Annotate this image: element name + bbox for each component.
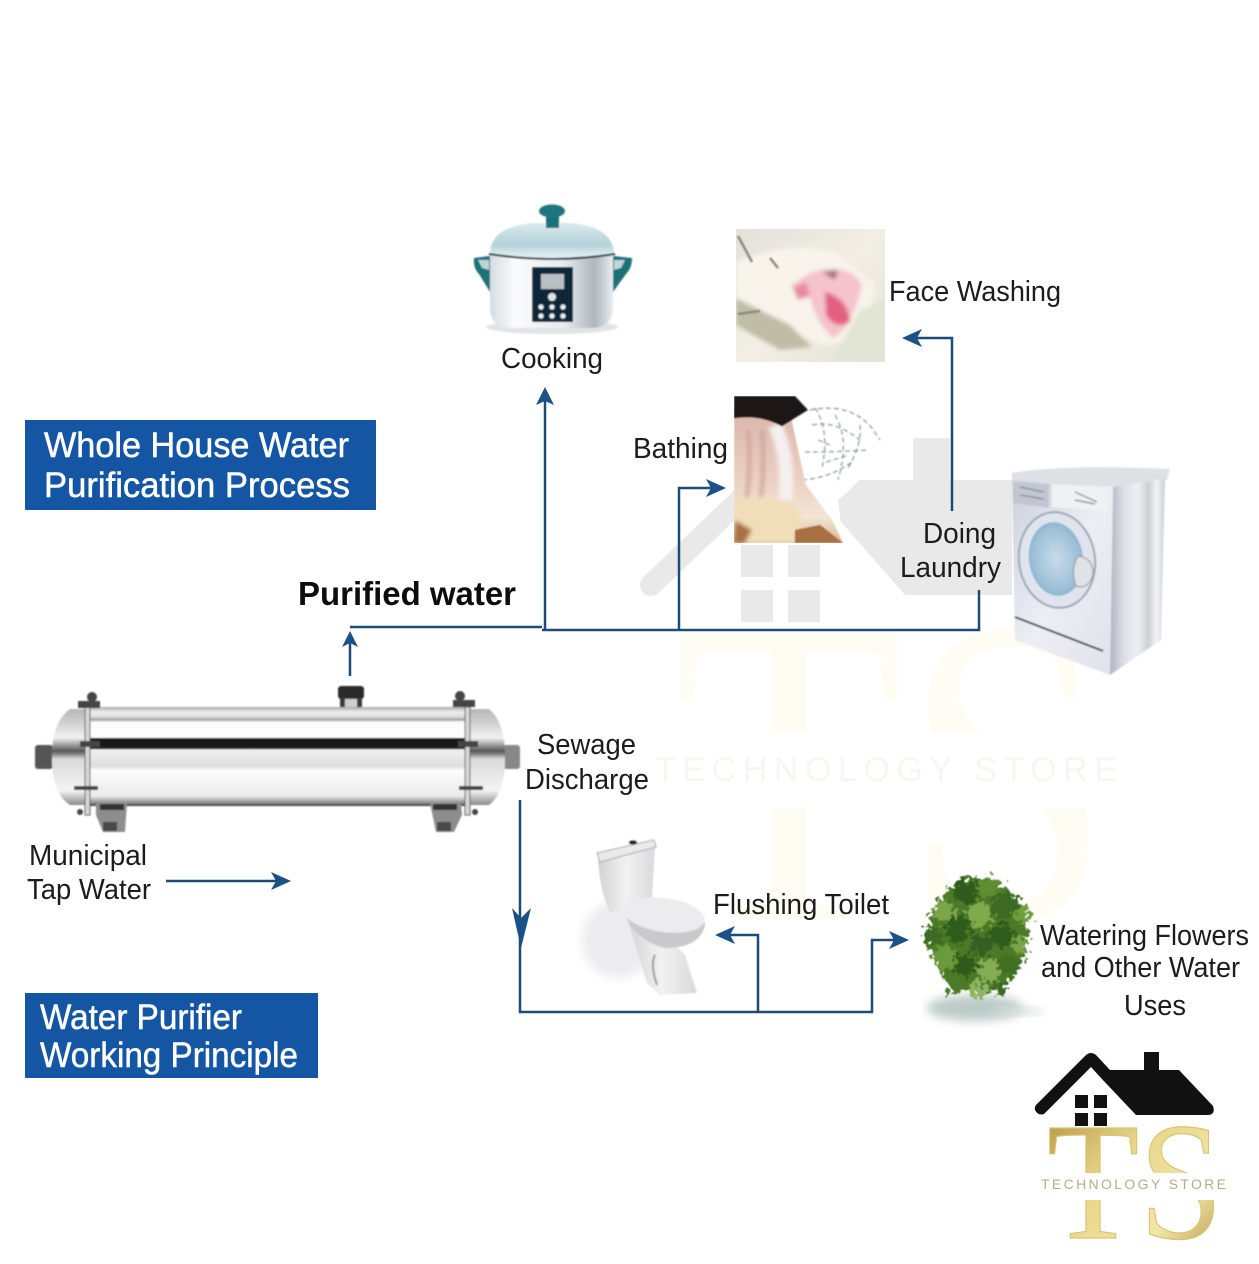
label: bathing: Bathing [633,433,728,465]
logo monogram [1049,1126,1214,1240]
logo: technology store [1034,1052,1226,1240]
icon: cooker [474,204,632,334]
watermark: store name: TECHNOLOGY STORE [655,751,1117,789]
label: sewage discharge: Sewage [537,729,636,761]
watermark: pale TS monogram: TS [674,529,1112,1016]
heading: water purifier working principle: Water Purifier [40,998,242,1037]
label: doing laundry: Doing [923,518,996,550]
icon: washing machine [1012,467,1170,675]
icon: plant [924,877,1044,1021]
image: face washing [736,229,885,362]
icon: stainless steel water purifier [35,686,520,832]
label: face washing: Face Washing [889,276,1061,308]
label: cooking: Cooking [501,343,603,375]
heading: whole house water purification process: Whole House Water [44,426,349,465]
heading: whole house water purification process [25,420,376,510]
label: watering flowers and other water uses: Watering Flowers [1040,920,1249,952]
arrow: tap water inlet [166,872,291,890]
image: bathing [734,396,882,543]
label: municipal tap water [27,840,151,906]
label: watering flowers and other water uses [1040,920,1249,1022]
label: flushing toilet: Flushing Toilet [713,889,889,921]
heading: water purifier working principle [25,993,318,1078]
arrows: sewage distribution [512,800,909,1012]
watermark: pale TS monogram [681,628,1088,922]
label: watering flowers and other water uses: Uses [1124,990,1186,1022]
logo store name: TECHNOLOGY STORE [1041,1176,1226,1192]
arrows: purified water distribution [342,329,979,676]
logo house [1035,1052,1214,1126]
icon: toilet [582,840,707,995]
label: sewage discharge [525,729,649,796]
label: municipal tap water: Municipal [29,840,147,872]
heading: water purifier working principle: Working Principle [40,1036,298,1075]
label: doing laundry [900,518,1001,584]
label: municipal tap water: Tap Water [27,874,151,906]
label: watering flowers and other water uses: and Other Water [1041,952,1240,984]
label: sewage discharge: Discharge [525,764,649,796]
watermark: pale TS monogram: TS [674,529,1112,1016]
heading: whole house water purification process: Purification Process [44,466,350,505]
label: doing laundry: Laundry [900,552,1001,584]
watermark: gray house [651,438,1012,622]
label: purified water: Purified water [298,575,516,612]
